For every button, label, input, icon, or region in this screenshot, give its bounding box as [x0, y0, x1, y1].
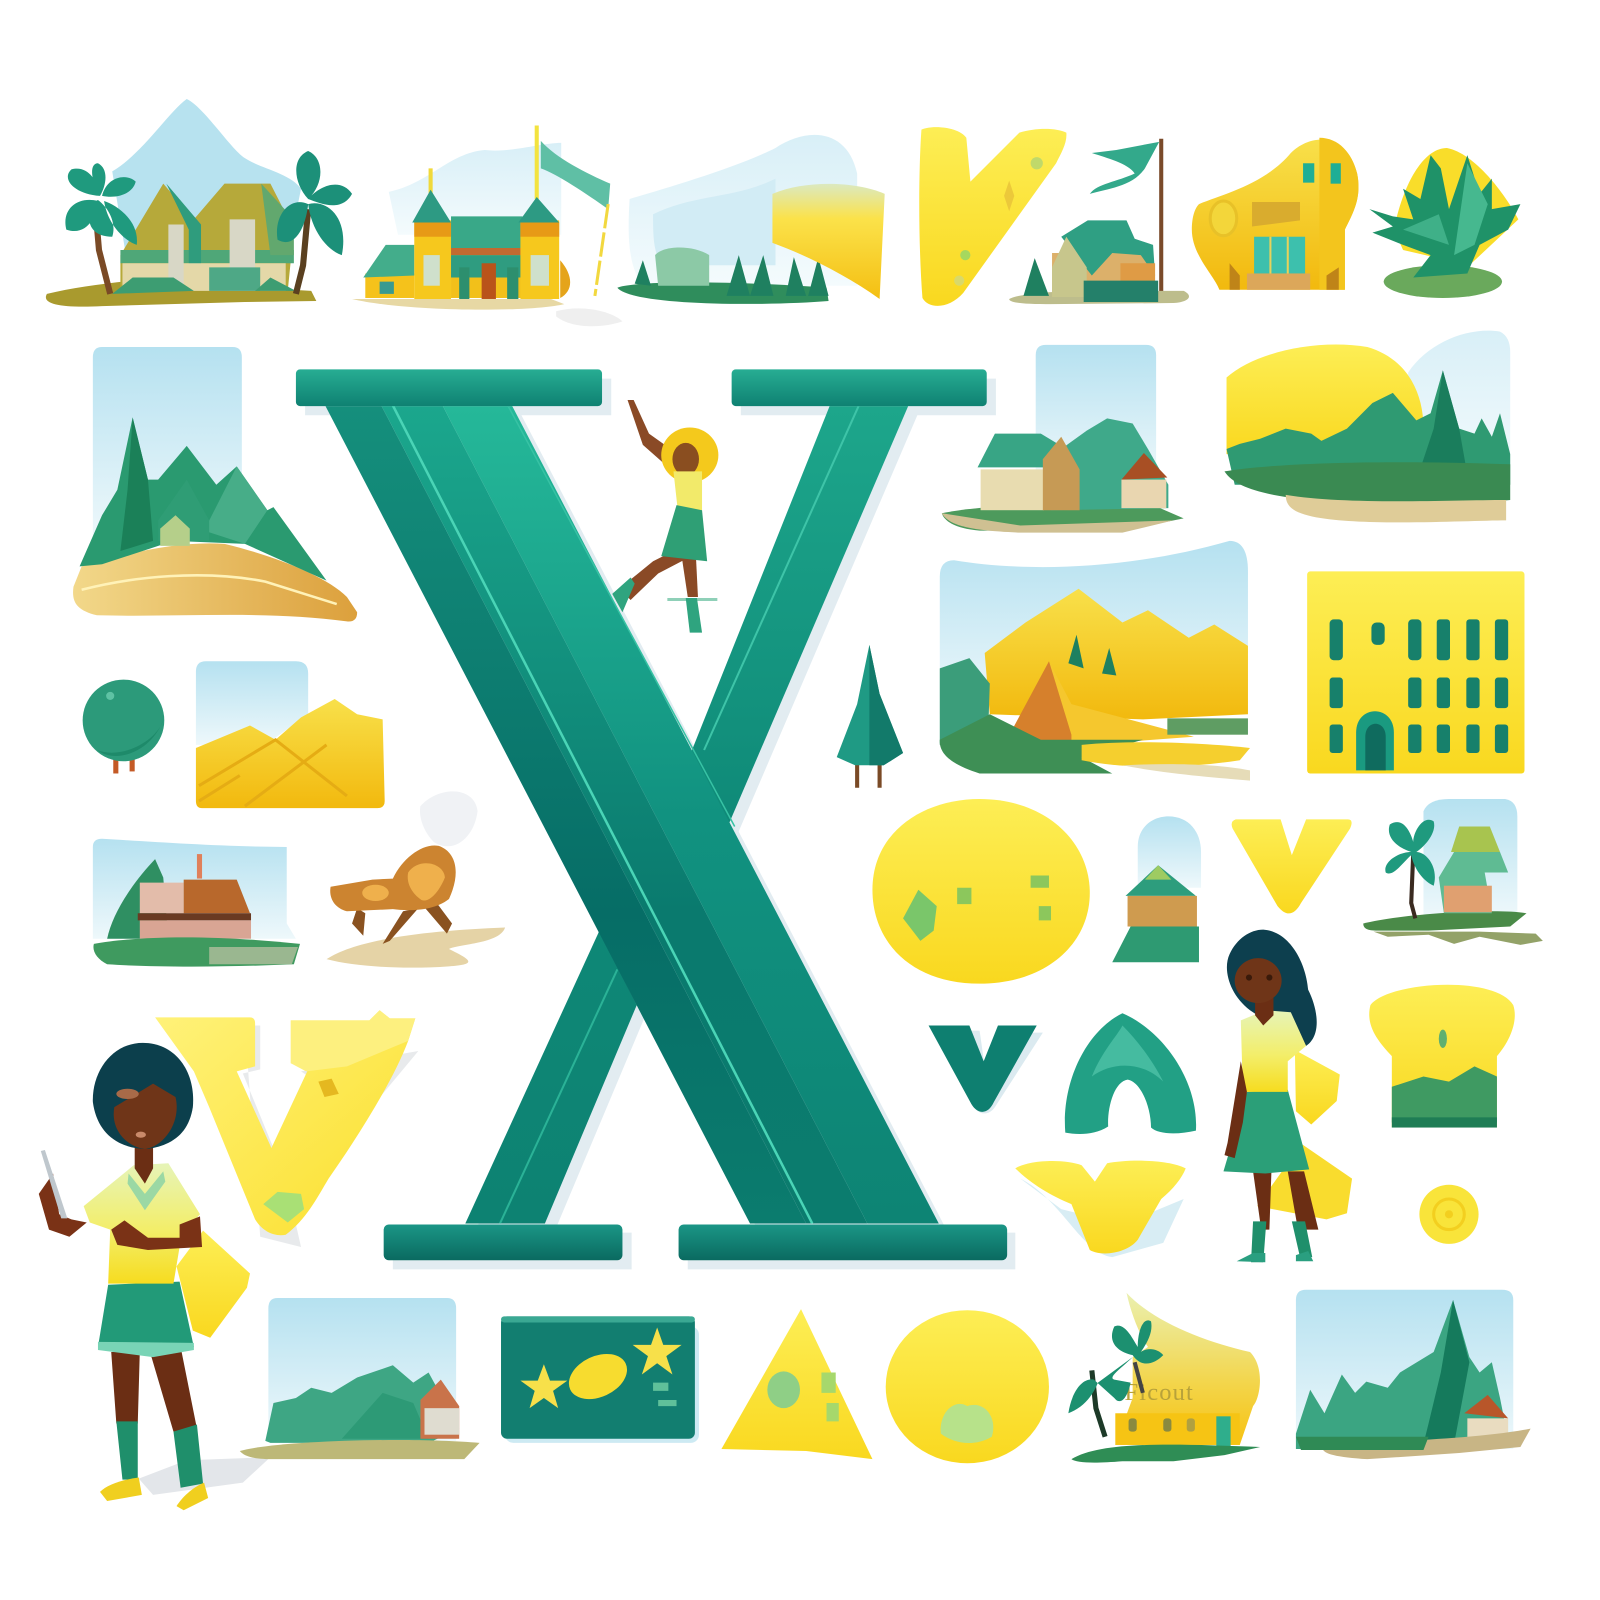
skirt [98, 1282, 194, 1355]
face [114, 1084, 177, 1149]
bottom panel: yellow house with palm [1068, 1293, 1260, 1463]
top row: yellow V [919, 127, 1066, 306]
top row: yellow castle with flag [352, 126, 622, 326]
arms [39, 1173, 87, 1237]
phone [41, 1150, 67, 1218]
yellow bucket with landscape [1369, 985, 1515, 1128]
building sign text: Ficout [1124, 1379, 1193, 1406]
icon: yellow letter A [721, 1309, 872, 1459]
shirt [84, 1163, 200, 1284]
legs [111, 1352, 197, 1432]
thick diagonal stroke [326, 380, 939, 1223]
yellow shoulder bag [177, 1231, 250, 1338]
right palm house scene [1363, 799, 1543, 945]
top row: palm house with mountain [46, 99, 352, 307]
top row: yellow building blob [1192, 138, 1359, 290]
socks [116, 1421, 203, 1488]
thin diagonal stroke [465, 398, 908, 1223]
right panel: yellow sun and forest [1224, 331, 1510, 522]
right panel: cottages [942, 345, 1184, 533]
left panel: lodge landscape [93, 839, 300, 967]
skirt [1223, 1090, 1309, 1173]
icon: green ball [83, 680, 164, 773]
yellow disc with leaf motifs [872, 799, 1090, 984]
top row: leafy plant with yellow dome [1369, 148, 1520, 298]
right girl character [1223, 930, 1352, 1262]
green arch [1065, 1013, 1196, 1134]
neck [135, 1138, 153, 1184]
yellow curved shield [1015, 1161, 1186, 1257]
hair [1227, 930, 1317, 1046]
upper bag [1295, 1050, 1340, 1124]
small yellow ring disc [1419, 1185, 1479, 1244]
socks [1251, 1221, 1312, 1262]
lower bag [1257, 1143, 1352, 1219]
left girl character [39, 1043, 270, 1510]
shoes [100, 1478, 142, 1501]
top row: mountain landscape with yellow banner [617, 135, 885, 304]
right panel: golden mountain landscape [940, 541, 1250, 781]
right panel: yellow building [1307, 571, 1524, 773]
X soft shadow [305, 379, 1015, 1269]
face [1235, 958, 1282, 1003]
arm [1224, 1061, 1247, 1158]
big letter X [296, 369, 1015, 1269]
small pine tree [837, 645, 903, 788]
large yellow V [155, 1010, 418, 1247]
icon: yellow disc [886, 1310, 1049, 1463]
shoes [1237, 1251, 1313, 1262]
hair [93, 1043, 193, 1149]
serifs [296, 369, 1007, 1260]
small green hut scene [1112, 816, 1201, 962]
neck [1255, 995, 1273, 1026]
yellow V small [1232, 819, 1352, 913]
legs [1253, 1171, 1318, 1230]
bottom panel: forest and lodge [1296, 1290, 1531, 1459]
icon: brown animal [327, 791, 505, 968]
bottom panel: green card with stars [501, 1316, 699, 1443]
shirt [1241, 1010, 1306, 1092]
green letter V [929, 1026, 1043, 1113]
small dancing figure [612, 400, 718, 633]
left panel: forest landscape [73, 347, 357, 622]
bottom panel: green hills with cottage [240, 1298, 480, 1459]
left panel: yellow mountains [196, 661, 385, 808]
top row: house with pennant flag [1009, 139, 1189, 304]
